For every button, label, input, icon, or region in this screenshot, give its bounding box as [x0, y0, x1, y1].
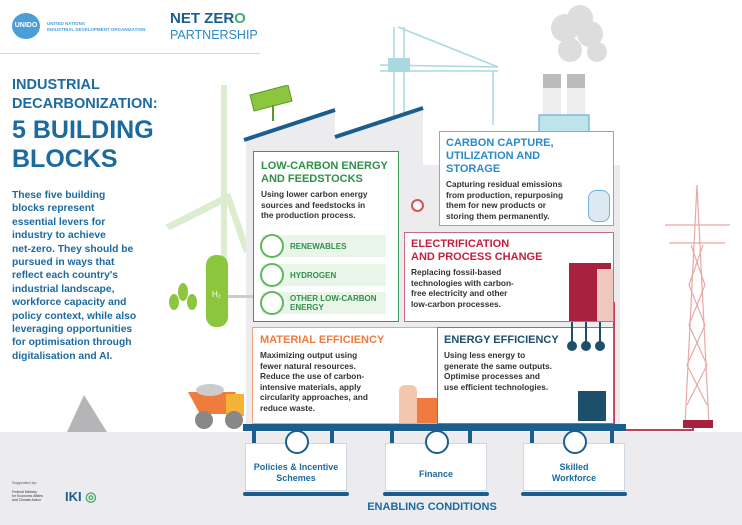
heading — [411, 238, 542, 263]
org name: UNITED NATIONS — [47, 21, 85, 26]
supporters: Supported by: — [12, 480, 37, 485]
enabling: finance — [385, 443, 487, 491]
text: storing them permanently. — [446, 211, 550, 221]
title: BLOCKS — [12, 145, 118, 173]
panel: material efficiency — [252, 327, 444, 424]
lamps — [567, 322, 605, 351]
intro text: blocks represent — [12, 203, 94, 214]
item: hydrogen: HYDROGEN — [290, 270, 336, 280]
panel: CCUS — [439, 131, 614, 226]
enabling: workforce: Workforce — [552, 473, 596, 483]
icon: UNIDO logo: UNIDO — [15, 22, 37, 29]
pylon — [665, 185, 730, 428]
intro text: policy context, while also — [12, 311, 136, 322]
base beam — [243, 424, 626, 431]
org name — [47, 21, 146, 32]
text: Using lower carbon energy — [261, 189, 368, 199]
heading: CARBON CAPTURE, — [446, 137, 554, 149]
heading: LOW-CARBON ENERGY — [261, 160, 388, 172]
wire to pylon — [613, 302, 694, 431]
ground — [0, 432, 742, 525]
text: Replacing fossil-based — [411, 267, 501, 277]
heading: UTILIZATION AND — [446, 150, 540, 162]
title: 5 BUILDING — [12, 116, 154, 144]
enabling: policies — [245, 443, 347, 491]
icon: motor — [578, 391, 606, 421]
icon: electric furnace — [569, 263, 611, 321]
intro text: for optimisation through — [12, 337, 132, 348]
text: from production, repurposing — [446, 190, 563, 200]
text: Using less energy to — [444, 350, 525, 360]
IKI logo: IKI ◎ — [65, 489, 97, 504]
icon: storage tank — [588, 190, 610, 222]
item: renewables: RENEWABLES — [290, 242, 346, 250]
icon: gauge — [411, 199, 424, 212]
enabling: policies: Schemes — [276, 473, 316, 483]
text: technologies with carbon- — [411, 278, 514, 288]
heading: ENERGY EFFICIENCY — [444, 334, 559, 346]
text: Federal Ministry — [12, 490, 37, 494]
text: reduce waste. — [260, 403, 315, 413]
net zero logo: NET ZERO — [170, 10, 246, 27]
enabling: workforce — [523, 443, 625, 491]
hydrogen tank: H₂ — [212, 290, 221, 299]
intro text: These five building — [12, 190, 105, 201]
item: other: ENERGY — [290, 303, 324, 312]
wind turbine — [165, 85, 246, 260]
intro text: digitalisation and AI. — [12, 351, 112, 362]
panel: low-carbon energy — [253, 151, 399, 322]
intro text: workforce capacity and — [12, 297, 126, 308]
chimneys and smoke — [538, 5, 607, 131]
text: Reduce the use of carbon- — [260, 371, 364, 381]
enabling: workforce: Skilled — [559, 462, 588, 472]
intro text: industrial landscape, — [12, 284, 114, 295]
heading: MATERIAL EFFICIENCY — [260, 334, 384, 346]
text: fewer natural resources. — [260, 361, 356, 371]
text — [444, 350, 552, 392]
item: hydrogen — [262, 264, 386, 286]
pillars — [252, 431, 256, 445]
text: free electricity and other — [411, 288, 507, 298]
title — [12, 77, 158, 173]
header — [0, 0, 260, 54]
text — [446, 179, 563, 221]
text: Optimise processes and — [444, 371, 540, 381]
item: other: OTHER LOW-CARBON — [290, 294, 376, 303]
text: and Climate Action — [12, 498, 41, 502]
text: circularity approaches, and — [260, 392, 368, 402]
text: sources and feedstocks in — [261, 200, 365, 210]
enabling: policies: Policies & Incentive — [254, 462, 338, 472]
item: renewables — [262, 235, 386, 257]
panel: electrification — [404, 232, 614, 322]
heading: AND PROCESS CHANGE — [411, 251, 542, 263]
enabling: finance: Finance — [419, 469, 453, 479]
solar panel — [249, 85, 293, 121]
icon: furnace — [399, 385, 417, 423]
plant — [169, 283, 197, 310]
intro text: reflect each country's — [12, 270, 118, 281]
heading: STORAGE — [446, 163, 500, 175]
intro text: industry to achieve — [12, 230, 106, 241]
title: INDUSTRIAL — [12, 77, 100, 93]
building — [243, 106, 620, 424]
intro text: leveraging opportunities — [12, 324, 132, 335]
hydrogen tank — [206, 255, 253, 327]
rock pile — [67, 395, 107, 432]
intro text: net-zero. They should be — [12, 244, 133, 255]
text: low-carbon processes. — [411, 299, 501, 309]
net zero logo — [170, 10, 258, 42]
text: Capturing residual emissions — [446, 179, 562, 189]
enabling conditions label: ENABLING CONDITIONS — [367, 501, 497, 513]
dump truck — [188, 384, 244, 429]
panel: energy efficiency — [437, 327, 614, 424]
intro text: pursued in ways that — [12, 257, 114, 268]
text: Maximizing output using — [260, 350, 357, 360]
heading — [446, 137, 554, 175]
heading: AND FEEDSTOCKS — [261, 173, 363, 185]
title: DECARBONIZATION: — [12, 96, 158, 112]
text: intensive materials, apply — [260, 382, 361, 392]
text — [261, 189, 368, 220]
heading — [261, 160, 388, 185]
text: for Economic Affairs — [12, 494, 43, 498]
org name: INDUSTRIAL DEVELOPMENT ORGANIZATION — [47, 27, 145, 32]
text: generate the same outputs. — [444, 361, 552, 371]
item: other — [262, 292, 386, 314]
crane — [380, 26, 498, 125]
text — [260, 350, 368, 413]
text: use efficient technologies. — [444, 382, 548, 392]
intro text — [12, 190, 136, 362]
text — [411, 267, 514, 309]
heading: ELECTRIFICATION — [411, 238, 509, 250]
text: the production process. — [261, 210, 356, 220]
net zero logo: PARTNERSHIP — [170, 28, 258, 42]
text: them for new products or — [446, 200, 546, 210]
intro text: essential levers for — [12, 217, 105, 228]
icon: UNIDO logo — [12, 13, 40, 39]
